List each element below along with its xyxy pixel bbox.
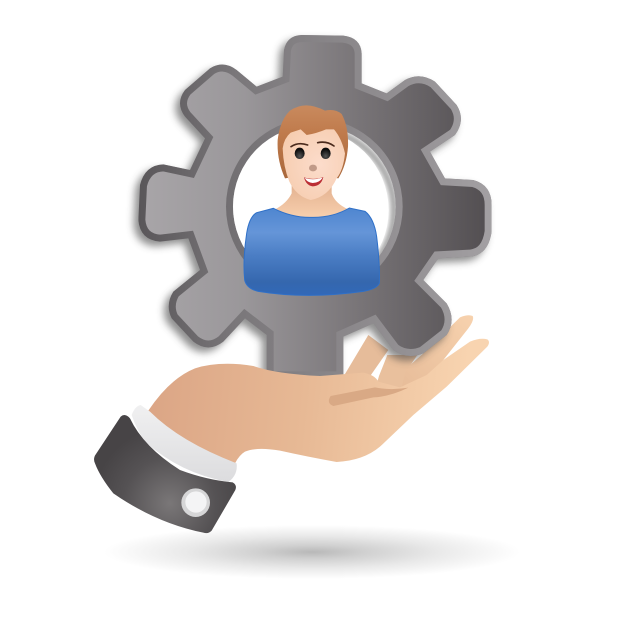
gear [134, 35, 492, 383]
hair back [278, 105, 348, 178]
left eyebrow [291, 144, 308, 147]
left eye [295, 148, 305, 159]
white shirt band [132, 405, 237, 482]
gear shadow [134, 40, 487, 383]
dark cuff [94, 415, 236, 533]
right eyebrow [318, 142, 334, 146]
mouth [304, 177, 323, 186]
palm and long finger [148, 339, 489, 463]
cuff button [181, 488, 210, 517]
illustration: hand holding gear with person [94, 34, 492, 575]
thumb crease [329, 387, 408, 406]
fingers behind gear [345, 315, 473, 395]
person [244, 105, 379, 295]
gear body [138, 35, 492, 378]
ground shadow [104, 525, 520, 579]
shirt [244, 208, 379, 295]
hand [94, 339, 489, 533]
face [283, 129, 345, 200]
teeth [305, 178, 323, 183]
nose [309, 165, 317, 171]
neck [275, 180, 348, 218]
right eye [321, 148, 331, 159]
gear hole [226, 124, 403, 266]
